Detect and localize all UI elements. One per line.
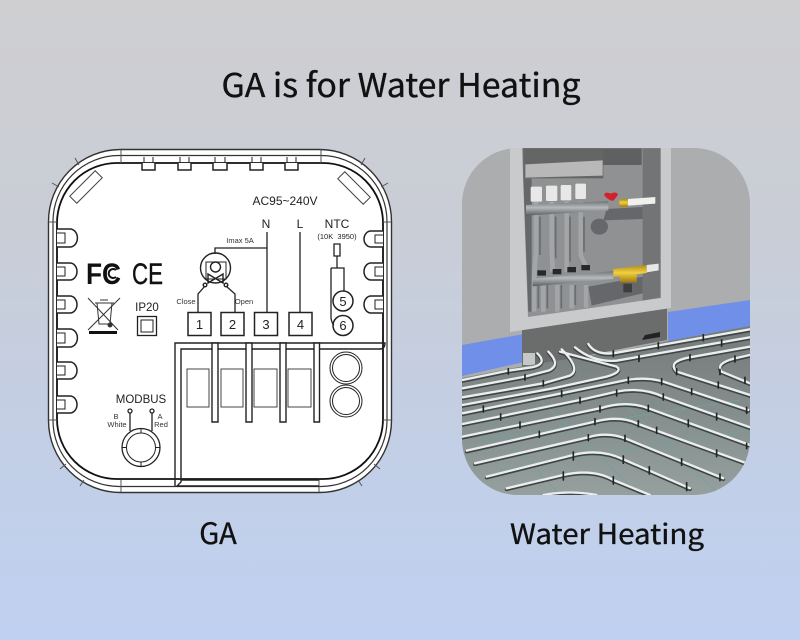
screw hole top [330, 352, 362, 384]
A Red label: A [157, 412, 163, 421]
cabinet top shelf [523, 148, 642, 178]
B White label: B [113, 412, 119, 421]
icon: IP20 square [138, 316, 156, 336]
current label: Imax 5A [226, 236, 254, 245]
terminal 1 [188, 312, 211, 336]
MODBUS connector [122, 409, 160, 466]
CE logo: CE [132, 258, 163, 291]
shadow on back [523, 178, 643, 312]
blue skirting left [462, 334, 524, 376]
valve caps [531, 184, 586, 202]
FC logo: FC [86, 258, 121, 291]
terminal 5 [333, 291, 353, 311]
NTC label: NTC [325, 217, 350, 231]
GA caption: GA [199, 511, 237, 553]
blue skirting right [668, 300, 750, 341]
terminal 5: 5 [339, 294, 347, 309]
Close label: Close [176, 297, 196, 306]
device body [48, 150, 392, 492]
panel: GA wiring diagram [48, 150, 392, 492]
MODBUS label: MODBUS [116, 394, 167, 406]
NTC spec label: (10K 3950) [317, 232, 357, 241]
top clips [142, 157, 298, 170]
manifold assembly [523, 148, 660, 312]
terminal 2 [221, 312, 244, 336]
white pipe bottom [647, 264, 659, 272]
NTC sensor [331, 244, 344, 325]
terminal 3: 3 [262, 317, 270, 332]
wiring lines [198, 232, 300, 312]
terminal 3 [254, 312, 278, 336]
pipe highlights [463, 329, 750, 495]
A Red label: Red [154, 420, 168, 429]
flow meters [537, 265, 590, 276]
bottom manifold [533, 271, 613, 286]
pipe shadows [463, 330, 750, 496]
title: GA is for Water Heating [222, 59, 581, 107]
corner slots [70, 171, 370, 204]
left clips [57, 229, 77, 413]
pipe clips [483, 335, 747, 491]
floor [462, 326, 750, 495]
icon: motorised valve [200, 253, 230, 287]
top manifold [526, 201, 608, 216]
brass fitting top [619, 199, 628, 207]
Water Heating caption: Water Heating [510, 513, 704, 553]
cabinet side wall [643, 148, 660, 300]
panel: water heating photo [462, 148, 750, 496]
cabinet frame [510, 148, 671, 332]
brass drain [623, 284, 632, 292]
cabinet interior [522, 148, 661, 317]
B White label: White [107, 420, 127, 429]
inner rim [48, 150, 392, 492]
terminal 4 [289, 312, 312, 336]
L label: L [297, 217, 304, 231]
voltage label: AC95~240V [252, 194, 318, 208]
terminal block [175, 343, 385, 486]
terminal 1: 1 [196, 317, 203, 332]
right clips [364, 231, 383, 313]
terminal 6: 6 [339, 318, 347, 333]
screw hole bottom [330, 385, 362, 417]
terminal 4: 4 [297, 317, 304, 332]
brass fitting bottom [613, 265, 647, 282]
terminal 6 [333, 316, 353, 336]
white pipe top [628, 197, 655, 206]
floor pipes [463, 329, 750, 496]
wall [462, 148, 750, 495]
floor grid [470, 400, 750, 495]
N label: N [262, 217, 270, 231]
terminal 2: 2 [229, 317, 236, 332]
icon: crossed-out bin [88, 298, 120, 334]
lower cabinet [522, 306, 667, 368]
vertical pipes [534, 202, 587, 312]
red valve [604, 192, 618, 201]
IP20 label: IP20 [135, 302, 159, 314]
Open label: Open [235, 297, 253, 306]
